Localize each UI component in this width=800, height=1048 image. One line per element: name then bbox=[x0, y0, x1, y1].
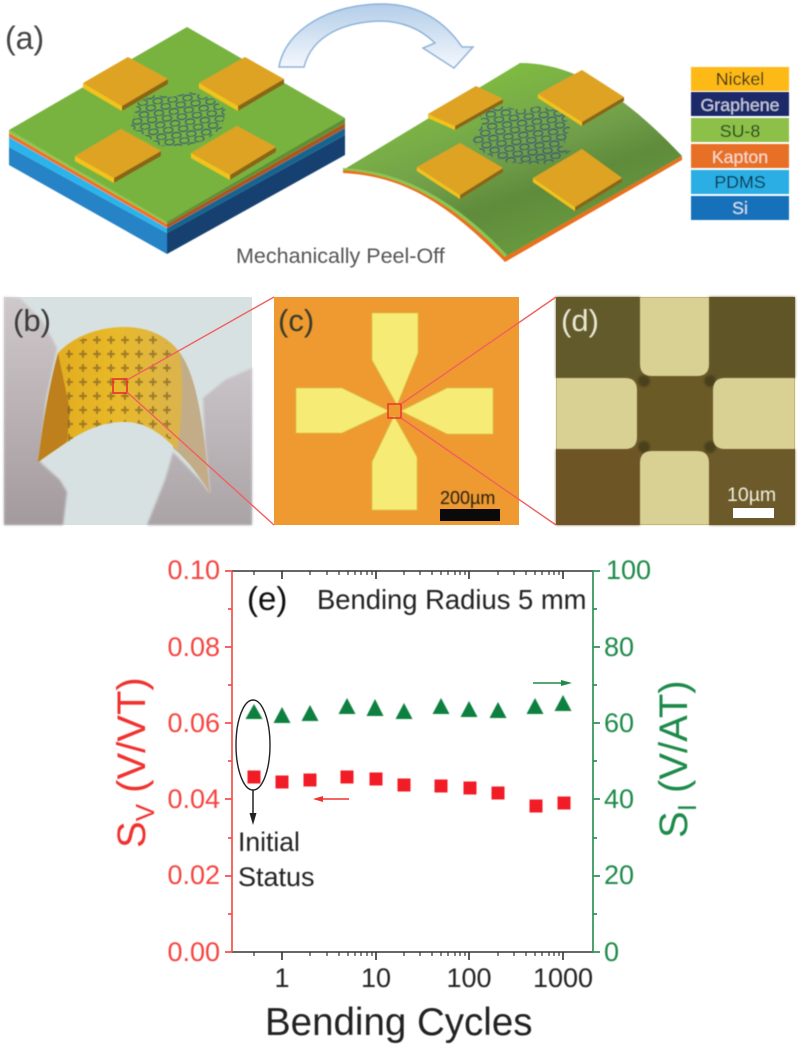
arrow: red series to left axis bbox=[313, 796, 349, 802]
arrow: green series to right axis bbox=[533, 680, 572, 686]
callout: initial status ellipse and arrow bbox=[236, 700, 315, 892]
right axis title: (V/AT) bbox=[652, 680, 696, 804]
right axis: S_I: 80 bbox=[604, 632, 634, 662]
x tick labels bbox=[274, 963, 593, 993]
x tick labels: 1000 bbox=[533, 963, 593, 993]
center zoom box bbox=[388, 404, 401, 418]
right axis: S_I: 0 bbox=[604, 937, 619, 967]
zoom connector lines between photos bbox=[127, 297, 556, 525]
legend: material layers: Nickel bbox=[716, 69, 764, 89]
left axis title: S bbox=[110, 821, 154, 848]
label (c): (c) bbox=[278, 303, 314, 338]
label (a): (a) bbox=[5, 20, 44, 56]
scale bar 200 µm bbox=[440, 488, 500, 521]
right glove bbox=[147, 368, 252, 525]
plot frame and x ticks bbox=[232, 571, 593, 960]
peel-off curved arrow bbox=[279, 4, 473, 68]
label (b): (b) bbox=[13, 303, 51, 338]
legend: material layers: PDMS bbox=[714, 172, 766, 192]
scale bar 10 µm bbox=[727, 484, 776, 518]
panel: (b) photo of bent film held in gloved fingers bbox=[4, 297, 252, 525]
nickel pads bent bbox=[417, 70, 624, 211]
right axis: S_I: 20 bbox=[604, 860, 634, 890]
left axis: S_V: 0.06 bbox=[167, 708, 220, 738]
right axis title: I bbox=[672, 804, 702, 811]
x tick labels: 100 bbox=[446, 963, 492, 993]
data series: green triangles S_I bbox=[246, 695, 572, 723]
left axis: S_V: 0.10 bbox=[167, 555, 220, 585]
caption: Mechanically Peel-Off: Mechanically Peel-Off bbox=[236, 244, 445, 268]
panel: (e) sensitivity vs bending cycles chart bbox=[110, 555, 702, 1044]
graphene lattice flat bbox=[130, 92, 226, 146]
label (d): (d) bbox=[561, 303, 599, 338]
legend: material layers: Graphene bbox=[700, 95, 780, 115]
legend: material layers bbox=[691, 67, 789, 220]
scale bar 10 µm: 10µm bbox=[727, 484, 776, 506]
panel: (a) device fabrication schematic bbox=[5, 4, 789, 268]
flat device on silicon stack bbox=[9, 27, 345, 254]
x tick labels: 10 bbox=[361, 963, 391, 993]
right axis: S_I: 100 bbox=[606, 555, 651, 585]
left axis: S_V: 0.08 bbox=[167, 632, 220, 662]
panel: (d) close-up micrograph of channel bbox=[556, 297, 795, 525]
legend: material layers: Si bbox=[732, 198, 748, 218]
graphene lattice bent bbox=[472, 106, 572, 164]
left axis: S_V: 0.00 bbox=[167, 937, 220, 967]
left axis: S_V: 0.04 bbox=[167, 784, 220, 814]
x axis title: Bending Cycles bbox=[265, 1001, 533, 1044]
yellow electrodes bbox=[296, 313, 493, 510]
right axis: S_I: 40 bbox=[604, 784, 634, 814]
data series: red squares S_V bbox=[248, 770, 570, 812]
left axis: S_V: 0.02 bbox=[167, 860, 220, 890]
right axis title: S bbox=[652, 811, 696, 838]
right axis: S_I: 60 bbox=[604, 708, 634, 738]
left axis title: (V/VT) bbox=[110, 677, 154, 804]
left glove bbox=[4, 297, 67, 525]
panel: (c) micrograph of a cross-shaped device bbox=[274, 297, 519, 525]
scale bar 200 µm: 200µm bbox=[440, 488, 495, 508]
legend: material layers: SU-8 bbox=[720, 121, 760, 141]
label (e): (e) bbox=[247, 580, 287, 617]
callout: initial status ellipse and arrow: Status bbox=[238, 862, 315, 892]
x tick labels: 1 bbox=[274, 963, 290, 993]
annotation: Bending Radius 5 mm: Bending Radius 5 mm bbox=[317, 584, 586, 615]
pale metal contacts bbox=[556, 297, 795, 525]
left axis title: V bbox=[130, 803, 160, 821]
flexible film with sensor array bbox=[38, 327, 210, 493]
left axis: S_V bbox=[110, 555, 232, 967]
callout: initial status ellipse and arrow: Initial bbox=[238, 827, 300, 857]
bent peeled device bbox=[343, 63, 682, 262]
right axis: S_I bbox=[593, 555, 702, 967]
legend: material layers: Kapton bbox=[712, 147, 768, 167]
zoom box on film bbox=[113, 379, 127, 393]
nickel pads flat bbox=[75, 57, 284, 183]
